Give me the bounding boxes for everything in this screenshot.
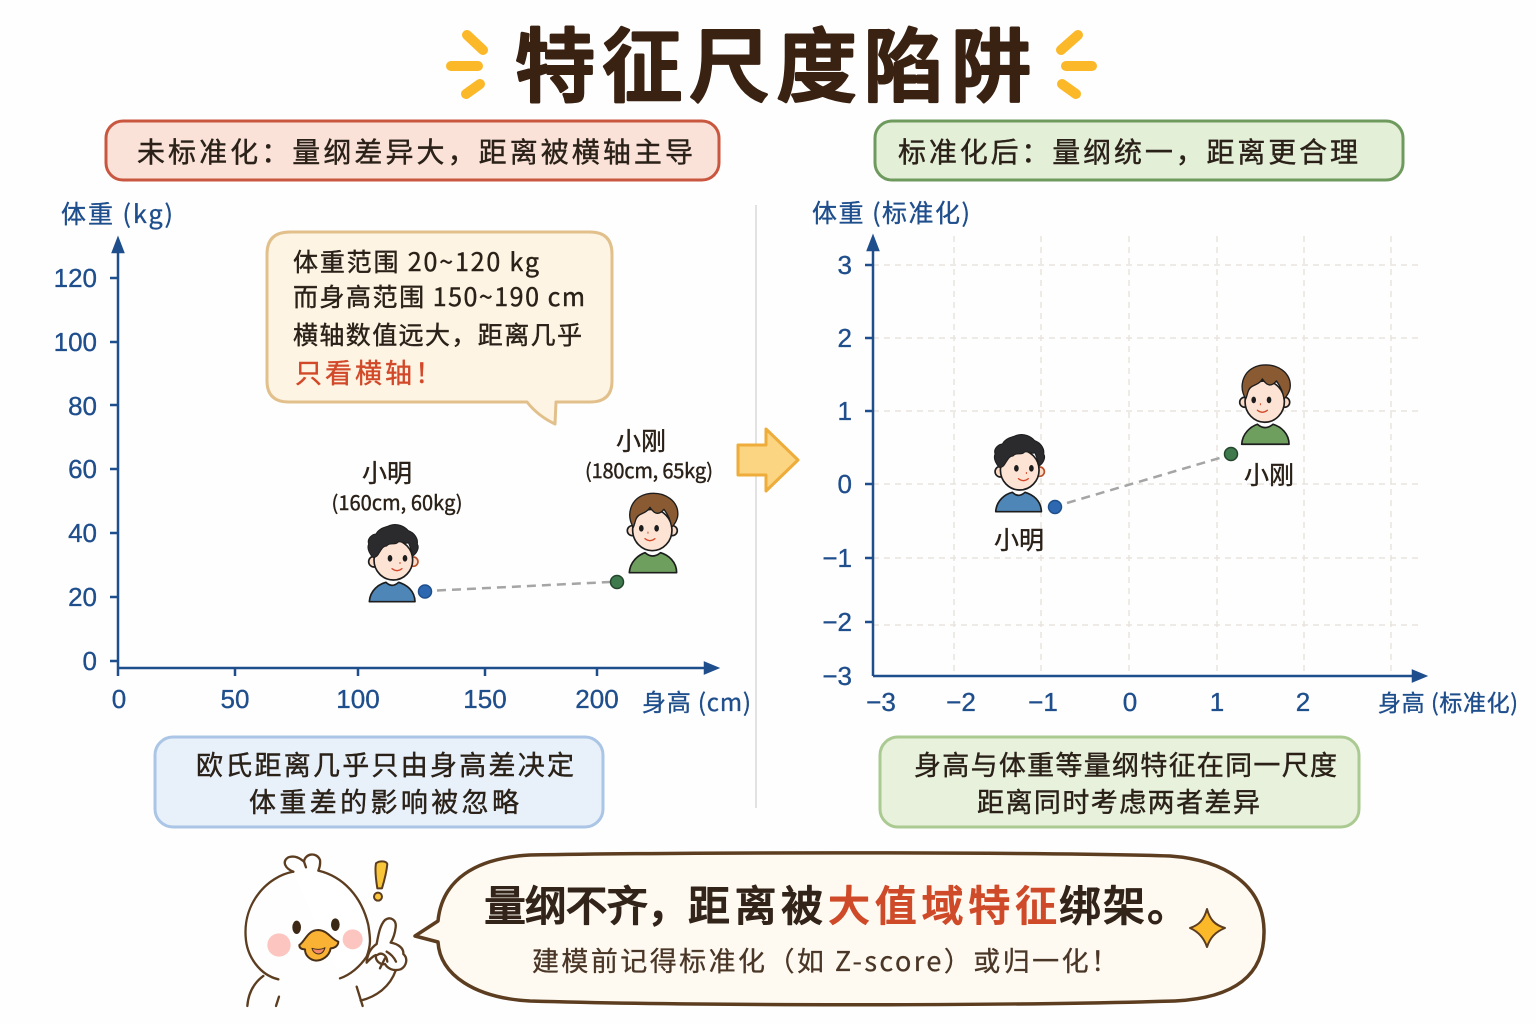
label: xiaogang left <box>585 422 713 484</box>
right x ticks: −3 <box>866 687 896 717</box>
left y ticks: 40 <box>68 518 97 548</box>
right y ticks: 2 <box>838 323 852 353</box>
bubble subtext: 建模前记得标准化（如 Z-score）或归一化！ <box>532 940 1118 979</box>
left conclusion box: 体重差的影响被忽略 <box>249 781 519 820</box>
left x ticks: 50 <box>221 684 249 714</box>
icon: duck mascot <box>246 855 406 1006</box>
left heading banner: 未标准化：量纲差异大，距离被横轴主导 <box>137 131 693 171</box>
arrow: left to right <box>738 429 798 491</box>
label: xiaogang right: 小刚 <box>1244 456 1294 492</box>
left chart <box>54 195 751 718</box>
left y axis label: 体重 (kg) <box>61 195 173 231</box>
right y ticks: −3 <box>822 661 852 691</box>
left y ticks: 120 <box>54 263 97 293</box>
title: 特征尺度陷阱 <box>515 3 1031 119</box>
right axes <box>865 237 1425 681</box>
left x ticks: 100 <box>336 684 380 714</box>
callout: weight and height ranges: 体重范围 20~120 kg <box>293 243 539 279</box>
icon: boy xiaogang left <box>627 493 678 573</box>
right conclusion box: 距离同时考虑两者差异 <box>977 781 1260 820</box>
icon: right title rays <box>1061 35 1092 94</box>
callout: weight and height ranges: 只看横轴！ <box>295 352 442 391</box>
left conclusion box <box>155 737 603 827</box>
icon: exclamation mark <box>374 861 387 901</box>
right heading banner: 标准化后：量纲统一，距离更合理 <box>898 131 1358 171</box>
right x axis label: 身高 (标准化) <box>1378 684 1518 718</box>
right heading banner <box>875 121 1403 180</box>
icon: sparkle <box>1190 909 1225 947</box>
right y axis label: 体重 (标准化) <box>812 194 970 230</box>
label: xiaoming left: (160cm, 60kg) <box>332 487 462 516</box>
point: xiaogang left <box>610 576 624 588</box>
divider <box>755 205 757 808</box>
callout: weight and height ranges <box>267 232 612 424</box>
right x ticks: −2 <box>946 687 976 717</box>
left heading banner <box>106 121 719 180</box>
left y ticks: 100 <box>54 327 97 357</box>
label: xiaogang left: (180cm, 65kg) <box>585 455 713 484</box>
line: right distance <box>1067 457 1223 503</box>
bubble headline: 量纲不齐， <box>484 873 689 934</box>
callout: weight and height ranges: 横轴数值远大，距离几乎 <box>293 316 582 352</box>
line: left distance <box>437 582 610 590</box>
right y ticks: −2 <box>822 607 852 637</box>
right x ticks: 1 <box>1210 687 1224 717</box>
label: xiaoming right: 小明 <box>994 521 1044 557</box>
right x ticks: 2 <box>1296 687 1310 717</box>
left x ticks: 0 <box>112 684 126 714</box>
bubble headline: 距离被 <box>688 873 823 934</box>
label: xiaogang left: 小刚 <box>616 422 666 458</box>
point: xiaoming right <box>1048 500 1062 514</box>
label: xiaoming left <box>332 454 462 516</box>
point: xiaogang right <box>1224 448 1238 460</box>
left x ticks: 150 <box>463 684 507 714</box>
left x axis label: 身高 (cm) <box>642 683 751 718</box>
right x ticks <box>866 687 1310 717</box>
icon: boy xiaoming left <box>368 524 418 602</box>
bubble headline <box>484 873 1189 934</box>
point: xiaoming left <box>418 585 432 598</box>
left y ticks: 80 <box>68 391 97 421</box>
right x ticks: −1 <box>1028 687 1058 717</box>
bubble headline: 绑架。 <box>1059 873 1189 934</box>
right y ticks: 0 <box>838 469 852 499</box>
left y ticks <box>54 263 97 676</box>
right y ticks: 1 <box>838 396 852 426</box>
right conclusion box: 身高与体重等量纲特征在同一尺度 <box>914 744 1337 783</box>
icon: pointing hand <box>367 918 406 970</box>
icon: left title rays <box>451 35 483 94</box>
left conclusion box: 欧氏距离几乎只由身高差决定 <box>196 744 574 783</box>
left x ticks: 200 <box>575 684 619 714</box>
label: xiaoming left: 小明 <box>362 454 412 490</box>
right y ticks <box>822 250 852 691</box>
left y ticks: 0 <box>83 646 97 676</box>
icon: boy xiaoming right <box>994 434 1045 512</box>
right conclusion box <box>880 737 1359 827</box>
right chart <box>812 194 1518 718</box>
speech bubble <box>415 853 1264 1005</box>
left axes <box>110 239 717 676</box>
left y ticks: 20 <box>68 582 97 612</box>
left x ticks <box>112 684 619 714</box>
right x ticks: 0 <box>1123 687 1137 717</box>
callout: weight and height ranges: 而身高范围 150~190 cm <box>293 278 585 314</box>
left y ticks: 60 <box>68 454 97 484</box>
bubble headline: 大值域特征 <box>828 873 1057 934</box>
right y ticks: −1 <box>822 543 852 573</box>
right y ticks: 3 <box>838 250 852 280</box>
icon: boy xiaogang right <box>1240 365 1290 444</box>
